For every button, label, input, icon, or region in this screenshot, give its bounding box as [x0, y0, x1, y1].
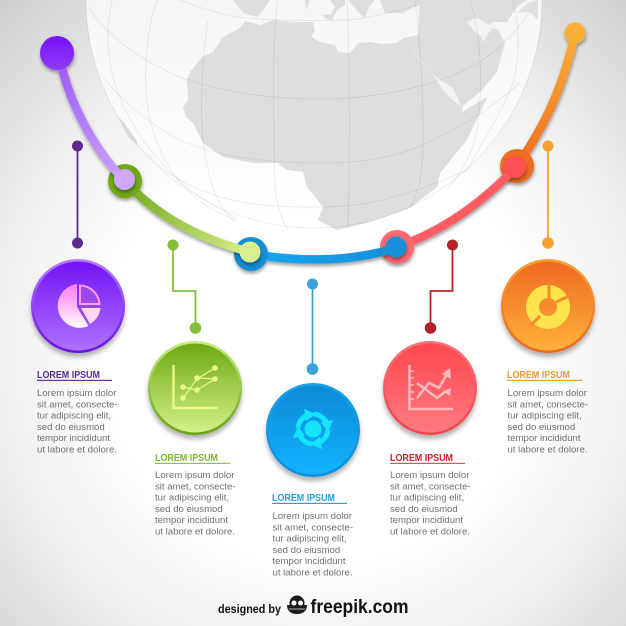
text block: red: sit amet, consecte-: [390, 481, 471, 492]
text block: orange: tempor incididunt: [508, 433, 581, 444]
text block: blue: tempor incididunt: [272, 556, 346, 567]
timeline step 4: red: [380, 156, 526, 264]
text block: green: LOREM IPSUM: [155, 453, 218, 464]
text block: orange: LOREM IPSUM: [507, 370, 570, 381]
text block: purple: ut labore et dolore.: [37, 444, 117, 456]
text block: red: Lorem ipsum dolor: [390, 470, 470, 481]
text block: green: Lorem ipsum dolor: [155, 470, 235, 481]
text block: blue: LOREM IPSUM: [272, 493, 335, 504]
text block: blue: sit amet, consecte-: [272, 522, 353, 533]
timeline step 1: purple: [40, 36, 135, 190]
connector: green: [168, 240, 201, 334]
timeline step 5: orange: [500, 22, 586, 183]
badge: green with scatter chart icon: [148, 341, 242, 435]
timeline step 3: blue: [234, 236, 406, 271]
text block: blue: sed do eiusmod: [272, 545, 340, 556]
connector: purple: [72, 140, 83, 248]
text block: purple: tur adipiscing elit,: [37, 411, 111, 422]
text block: orange: sit amet, consecte-: [508, 399, 588, 410]
text block: purple: Lorem ipsum dolor: [37, 388, 117, 399]
text block: red: ut labore et dolore.: [390, 526, 470, 538]
badge: red with growth chart icon: [383, 341, 477, 435]
text block: green: [155, 453, 236, 538]
text block: purple: LOREM IPSUM: [37, 370, 100, 381]
text block: orange: Lorem ipsum dolor: [508, 388, 588, 399]
globe grid: [86, 0, 542, 230]
landmass: slivers at globe edge: [118, 0, 538, 146]
icon: line chart: [174, 365, 218, 408]
badge: blue with cycle icon: [266, 383, 360, 477]
red sea: [410, 47, 462, 107]
timeline step 2: green: [108, 164, 260, 262]
icon: freepik mascot: [287, 596, 307, 614]
persian gulf: [467, 18, 498, 42]
text block: purple: sed do eiusmod: [37, 422, 105, 433]
text block: blue: [272, 493, 353, 578]
badge: purple with pie chart icon: [31, 259, 125, 353]
text block: green: sed do eiusmod: [155, 504, 223, 515]
text block: red: sed do eiusmod: [390, 504, 458, 515]
footer credit: [218, 596, 408, 618]
text block: red: tur adipiscing elit,: [390, 493, 464, 504]
text block: blue: ut labore et dolore.: [272, 568, 353, 578]
connector: blue: [307, 278, 318, 375]
text block: blue: tur adipiscing elit,: [272, 534, 347, 545]
badge: orange with donut chart icon: [501, 259, 595, 353]
text block: purple: sit amet, consecte-: [37, 399, 118, 410]
landmass: Africa and Arabia: [183, 0, 527, 230]
icon: donut chart: [531, 283, 571, 325]
text block: green: tur adipiscing elit,: [155, 493, 229, 504]
text block: orange: tur adipiscing elit,: [508, 411, 582, 422]
globe with world map: [86, 0, 542, 230]
footer credit: freepik.com: [310, 597, 408, 618]
icon: pie chart: [58, 284, 100, 328]
text block: red: tempor incididunt: [390, 515, 463, 526]
text block: orange: ut labore et dolore.: [508, 444, 588, 456]
icon: growth chart: [410, 365, 453, 409]
text block: green: ut labore et dolore.: [155, 526, 235, 538]
text block: green: tempor incididunt: [155, 515, 228, 526]
footer credit: designed by: [218, 602, 281, 616]
text block: orange: sed do eiusmod: [508, 422, 575, 433]
text block: orange: [507, 370, 588, 456]
text block: purple: tempor incididunt: [37, 433, 110, 444]
text block: blue: Lorem ipsum dolor: [272, 511, 353, 522]
connector: red: [425, 240, 458, 334]
text block: green: sit amet, consecte-: [155, 481, 236, 492]
text block: red: [390, 453, 471, 538]
text block: purple: [37, 370, 118, 456]
landmass: Europe: [233, 0, 420, 20]
icon: cycle arrows: [293, 409, 333, 449]
connector: orange: [542, 140, 554, 249]
text block: red: LOREM IPSUM: [390, 453, 453, 464]
